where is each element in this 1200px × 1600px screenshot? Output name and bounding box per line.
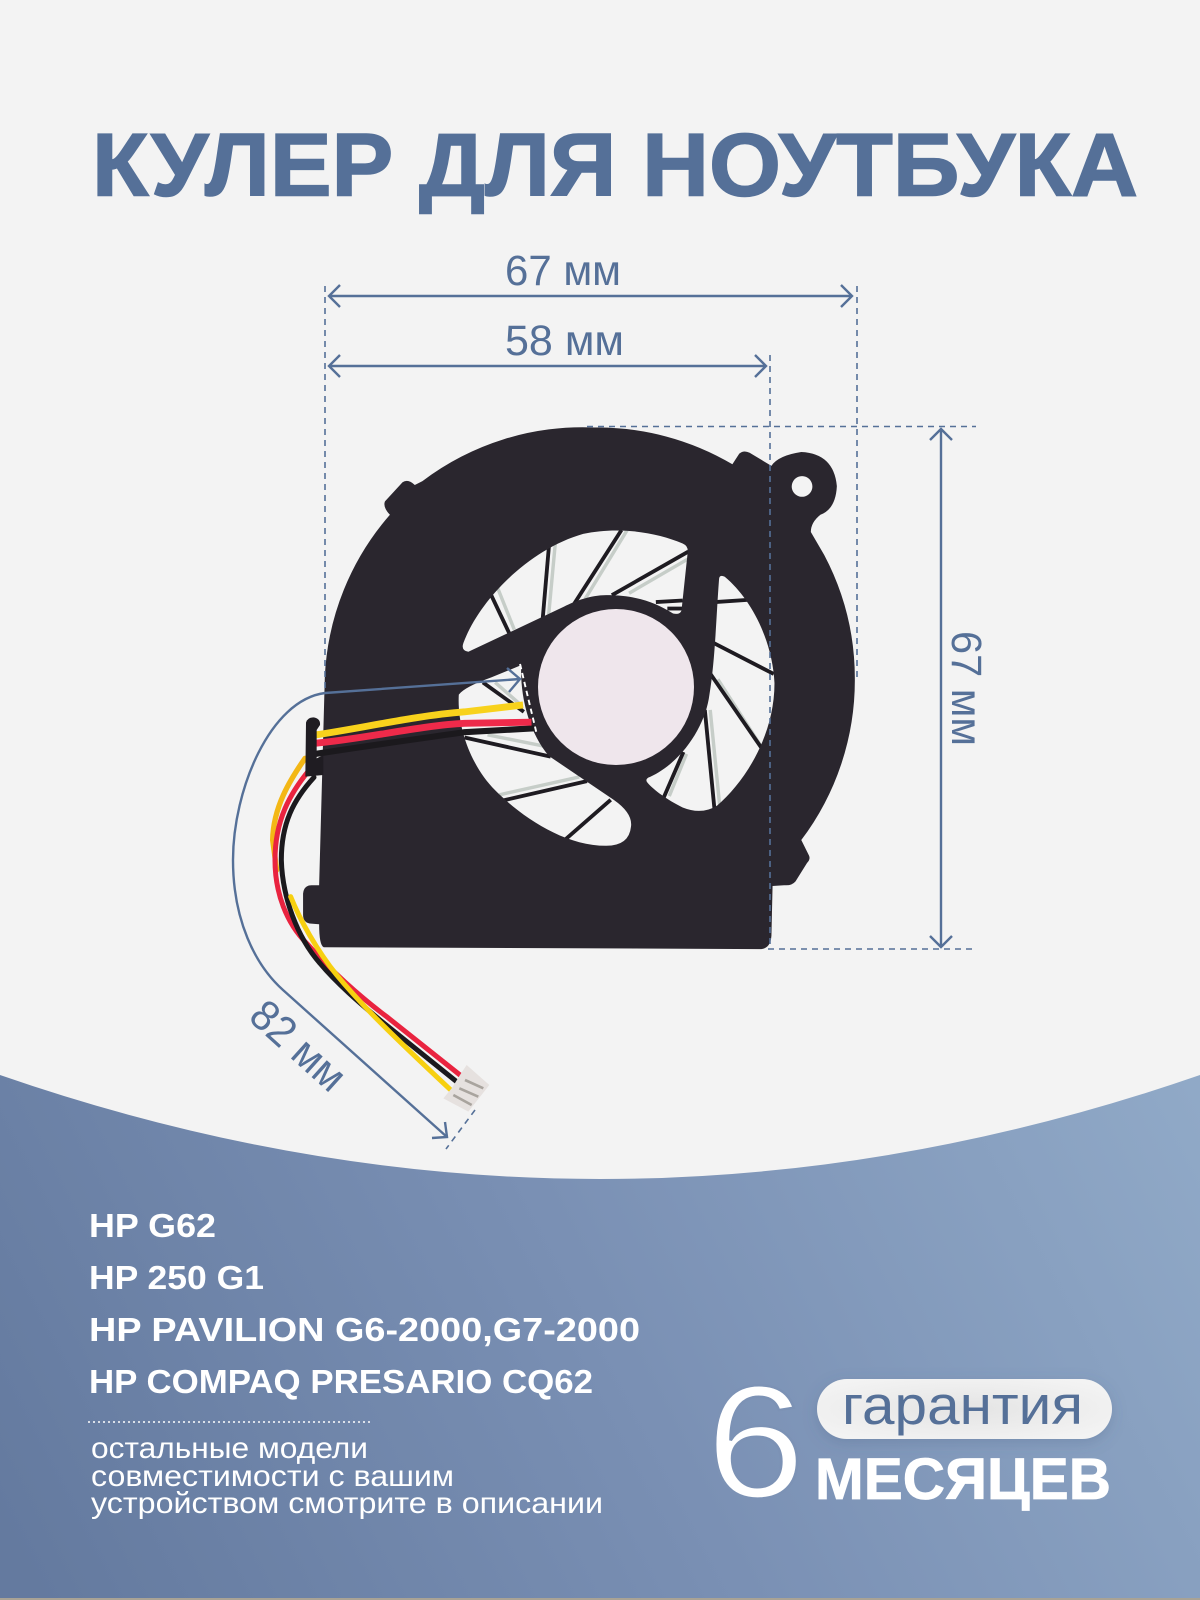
compatibility note: совместимости с вашим	[91, 1460, 454, 1493]
fan body	[303, 427, 855, 949]
dimension: 58 mm width: 58 мм	[505, 317, 624, 365]
dimension: 82 mm cable length: 82 мм	[240, 991, 356, 1101]
compatible models list: HP PAVILION G6-2000,G7-2000	[89, 1312, 640, 1349]
dashed guide lines	[325, 286, 976, 1149]
dimension: 82 mm cable length	[233, 668, 520, 1138]
dimension: 58 mm width	[329, 317, 766, 377]
cable clip and connector	[291, 717, 489, 1112]
dimension: 67 mm height: 67 мм	[942, 631, 990, 746]
hub sticker	[538, 609, 694, 765]
compatible models list	[89, 1208, 640, 1401]
compatibility note: устройством смотрите в описании	[91, 1487, 603, 1520]
warranty months: МЕСЯЦЕВ	[815, 1447, 1111, 1512]
warranty number: 6	[706, 1352, 805, 1531]
fan blades	[465, 530, 774, 839]
compatibility note: остальные модели	[91, 1432, 368, 1465]
dimension: 67 mm width: 67 мм	[505, 247, 621, 295]
cable loop	[273, 758, 460, 1082]
dimension: 67 mm height	[930, 429, 990, 947]
compatible models list: HP COMPAQ PRESARIO CQ62	[89, 1364, 593, 1401]
bottom curved band	[0, 1075, 1200, 1600]
compatible models list: HP 250 G1	[89, 1260, 264, 1297]
compatibility note	[91, 1432, 603, 1520]
fan wires	[315, 664, 536, 754]
dimension: 67 mm width	[329, 247, 852, 307]
compatible models list: HP G62	[89, 1208, 216, 1245]
warranty pill: гарантия	[842, 1374, 1083, 1436]
title: КУЛЕР ДЛЯ НОУТБУКА	[92, 114, 1138, 214]
dotted separator	[88, 1421, 372, 1423]
